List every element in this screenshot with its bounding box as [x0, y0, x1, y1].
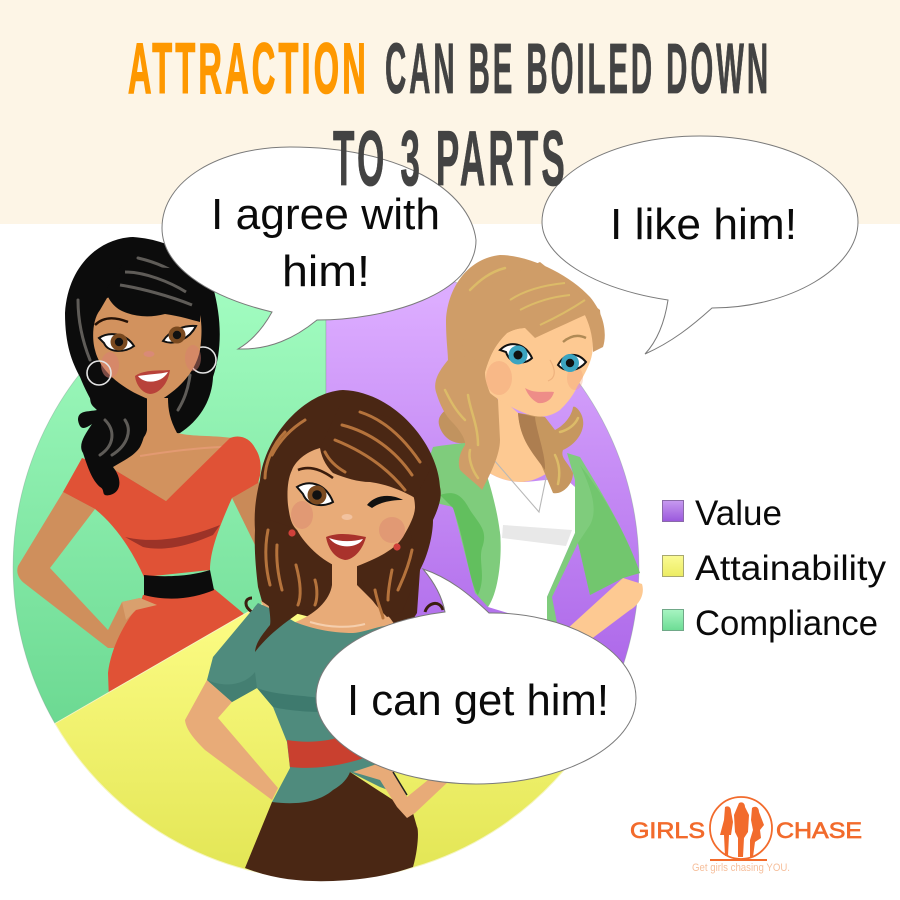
logo silhouettes — [720, 802, 764, 857]
back hair — [65, 237, 220, 440]
hair front lock — [255, 520, 332, 652]
sleeve shade — [207, 672, 257, 702]
hair highlights — [78, 258, 190, 455]
bubble text: agree — [211, 190, 440, 296]
bubble text: like: I like him! — [610, 200, 797, 249]
character: blonde woman — [425, 255, 643, 640]
bangs — [320, 405, 430, 498]
bang highlight — [510, 283, 585, 325]
cheek blush — [486, 361, 512, 395]
speech bubble: agree — [162, 147, 476, 349]
legend — [662, 494, 887, 643]
speech bubble: like — [542, 136, 858, 354]
face — [93, 295, 202, 402]
teal blouse — [207, 603, 407, 803]
header band — [0, 0, 900, 224]
collar line — [140, 447, 222, 456]
green cardigan right — [547, 453, 640, 628]
open eye — [297, 483, 333, 505]
cheeks — [101, 352, 119, 378]
title — [128, 30, 771, 202]
bubble text: can get: I can get him! — [347, 676, 609, 725]
neck and chest — [110, 398, 232, 501]
left arm — [17, 492, 150, 648]
face — [287, 448, 415, 570]
mouth — [326, 534, 366, 560]
neck and chest — [485, 395, 547, 482]
pie slice: compliance — [13, 254, 326, 724]
right arm — [232, 480, 270, 570]
title: TO 3 PARTS — [333, 114, 568, 202]
brown skirt — [245, 772, 418, 881]
back hair left curl — [439, 400, 470, 443]
hair highlights — [265, 420, 420, 618]
eyebrows — [95, 318, 128, 325]
blue eyes — [500, 344, 586, 372]
collar line — [310, 622, 365, 627]
hair mass — [446, 255, 605, 400]
eyebrows — [563, 336, 586, 342]
blouse waist shade — [257, 688, 322, 712]
white top — [485, 470, 575, 625]
nose — [548, 360, 554, 381]
cardigan shade — [440, 493, 484, 595]
legend label: value: Value — [695, 494, 782, 533]
left hand — [122, 598, 157, 620]
blush — [291, 501, 313, 529]
eyebrows — [298, 468, 333, 478]
front left hair lock — [435, 350, 500, 490]
blonde bangs — [462, 262, 603, 372]
left earring — [87, 361, 111, 385]
legend swatch: compliance — [662, 610, 684, 630]
line one: I agree with — [211, 190, 440, 239]
logo wordmark left: GIRLS — [630, 818, 705, 843]
logo tagline: Get girls chasing YOU. — [692, 862, 790, 874]
face — [485, 315, 593, 417]
legend label: compliance: Compliance — [695, 604, 878, 643]
right sleeve shade — [578, 465, 640, 595]
hair highlights — [445, 268, 578, 484]
legend swatch: attainability — [662, 556, 684, 576]
top shade — [502, 525, 572, 546]
red dress top — [63, 436, 261, 577]
pie slice: attainability — [55, 567, 597, 880]
nose — [144, 351, 154, 357]
pie chart — [13, 254, 639, 724]
mouth — [525, 388, 554, 403]
eyes — [99, 326, 196, 351]
front hair lock — [78, 395, 147, 495]
black belt — [144, 570, 214, 599]
logo base line — [710, 859, 767, 861]
logo wordmark right: CHASE — [776, 818, 862, 843]
nose — [342, 514, 352, 520]
pie slice: value — [326, 254, 639, 724]
legend label: attainability: Attainability — [695, 549, 887, 588]
neck and chest — [256, 560, 395, 640]
dress waist shade — [125, 525, 220, 549]
logo ring — [710, 797, 772, 859]
speech bubble: can get — [316, 569, 636, 784]
logo: girls chase — [630, 797, 862, 874]
bang highlights — [325, 412, 420, 490]
hand shadow line — [393, 772, 407, 795]
red belt — [287, 737, 367, 768]
character: black-haired woman — [17, 237, 270, 700]
hair curl ends — [246, 598, 443, 612]
line two: him! — [282, 247, 370, 296]
red skirt — [108, 588, 252, 700]
right hair front — [357, 530, 420, 617]
legend swatch: value — [662, 500, 684, 522]
bangs — [107, 265, 200, 322]
bang highlight — [120, 272, 192, 305]
title: ATTRACTION — [128, 30, 369, 109]
right forearm — [555, 578, 643, 640]
left arm — [185, 680, 278, 800]
necklace — [494, 460, 547, 512]
right earring — [190, 347, 216, 373]
right hair lock — [518, 407, 583, 493]
character: brunette woman — [185, 390, 450, 881]
right hand and arm — [353, 763, 450, 818]
mouth — [135, 370, 170, 394]
back hair — [255, 390, 441, 640]
hair lock shadow — [518, 413, 545, 470]
winking eye — [367, 496, 403, 508]
green cardigan left — [425, 443, 501, 607]
earrings — [288, 529, 401, 551]
